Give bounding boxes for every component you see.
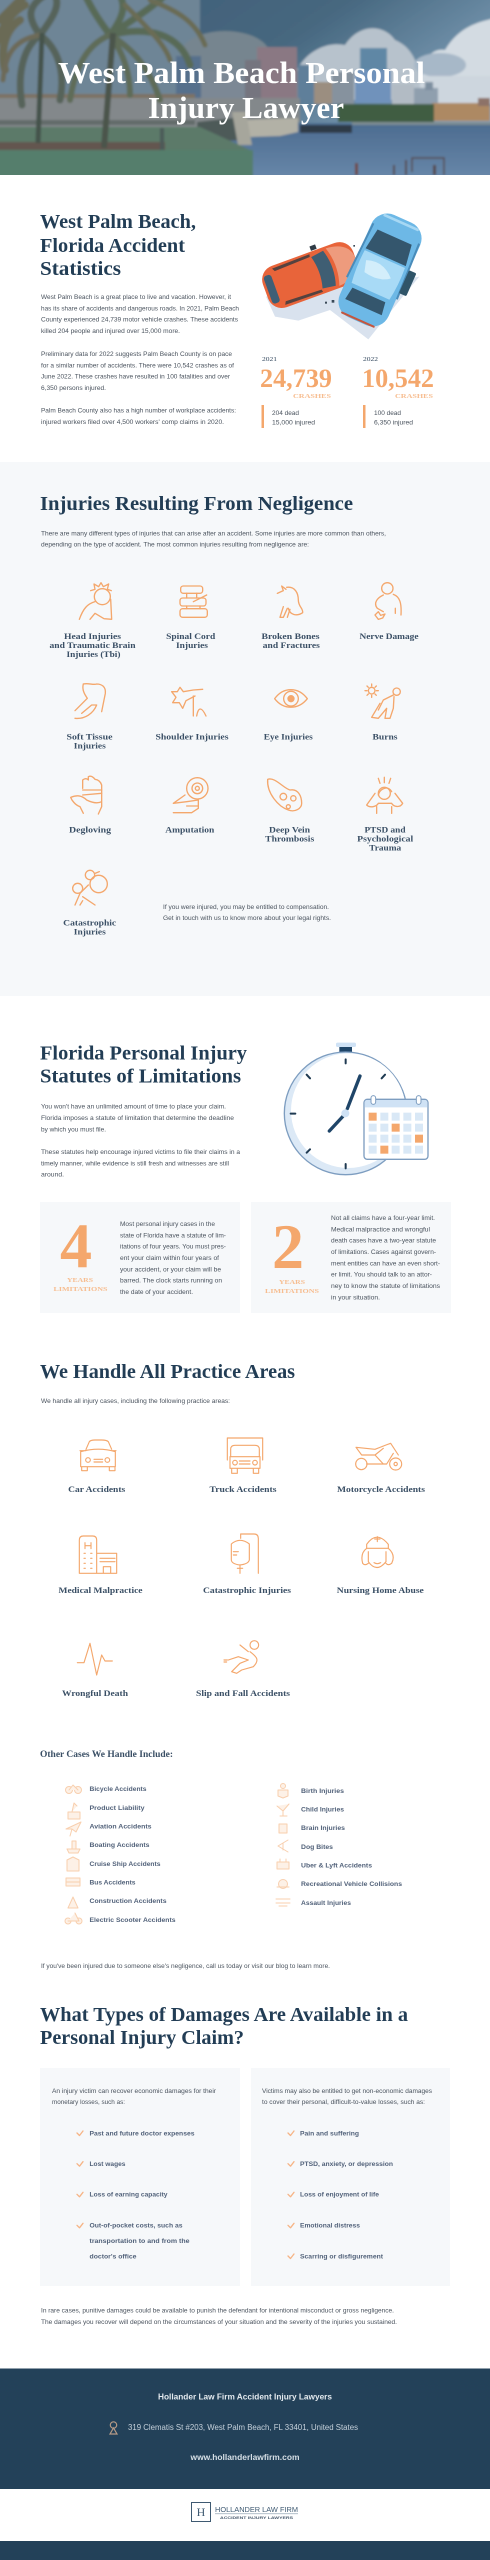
stat: 2022 crashes: 2022 [363, 356, 378, 363]
card: economic damages: An injury victim can recover economic damages for their [52, 2088, 216, 2095]
icon: deep vein [268, 779, 302, 811]
text block: statutes intro: around. [41, 1172, 64, 1179]
text block: statutes intro [41, 1104, 241, 1179]
heading: damages: What Types of Damages Are Available in a [40, 2004, 408, 2026]
injury labels: Injuries [176, 640, 209, 650]
card: economic damages: Past and future doctor expenses [90, 2130, 195, 2137]
list: other cases left column: Boating Accidents [90, 1842, 150, 1849]
injury labels: Injuries (Tbi) [66, 649, 121, 659]
practice area icons [77, 1438, 402, 1675]
injury labels: Psychological [357, 833, 414, 843]
stat: 2022 crashes: 10,542 [362, 364, 434, 393]
card: 2 years limitations [251, 1202, 451, 1313]
hero photo: waterfront skyline [0, 0, 490, 180]
list: other cases right column: Assault Injuries [301, 1900, 351, 1907]
list: other cases left column [65, 1785, 176, 1924]
injury labels: PTSD and [364, 824, 406, 834]
icon: broken bones [277, 586, 303, 617]
practice area labels: Nursing Home Abuse [337, 1585, 424, 1595]
list: other cases left column: Construction Accidents [90, 1898, 167, 1905]
hero title: West Palm Beach Personal [58, 55, 425, 90]
panel: injuries resulting from negligence [0, 462, 490, 996]
text block: injuries intro: There are many different types of injuries that can arise after an accident. Some injuries are more common than others, [41, 530, 386, 538]
injury labels: and Traumatic Brain [50, 640, 136, 650]
stat: 2021 crashes: 15,000 injured [272, 420, 316, 426]
icon: IV drip [231, 1534, 258, 1573]
heading: accident statistics: West Palm Beach, [40, 211, 196, 233]
heading: damages: Personal Injury Claim? [40, 2027, 244, 2049]
injury labels: Thrombosis [265, 833, 315, 843]
hero banner [0, 0, 490, 180]
card: economic damages: doctor's office [90, 2253, 137, 2260]
bridge [0, 98, 300, 128]
icon: shoulder [172, 687, 206, 716]
stat: 2022 crashes [362, 356, 434, 428]
palm fronds [0, 0, 205, 105]
text block: injuries intro [41, 530, 386, 549]
heading: statutes of limitations: Florida Personal Injury [40, 1042, 247, 1064]
card: 4 years limitations: YEARS [67, 1277, 93, 1284]
practice area labels: Medical Malpractice [58, 1585, 143, 1595]
card: 4 years limitations: your accident, or your claim will be [120, 1266, 222, 1273]
icon: motorcycle [356, 1443, 402, 1470]
text block: statistics intro: has its share of accidents and dangerous roads. In 2021, Palm Beach [41, 305, 240, 312]
card: non-economic damages: Emotional distress [300, 2223, 360, 2230]
icon: truck [227, 1438, 263, 1473]
injury labels: Head Injuries [64, 631, 122, 641]
card: economic damages: transportation to and from the [90, 2238, 190, 2245]
list: other cases left column: Aviation Accidents [90, 1824, 152, 1830]
text block: punitive damages: The damages you recover will depend on the circumstances of your situation and the severity of the injuries you sustained. [41, 2319, 397, 2326]
text block: practice areas intro: We handle all injury cases, including the following practice areas: [41, 1398, 230, 1405]
icon: nerve damage [375, 583, 401, 619]
list: other cases right column: Birth Injuries [301, 1788, 344, 1795]
heading: statutes of limitations: Statutes of Limitations [40, 1066, 241, 1088]
text block: compensation note: Get in touch with us to know more about your legal rights. [163, 915, 331, 922]
list icons left [65, 1785, 82, 1924]
icon: slip and fall [224, 1641, 259, 1673]
card: 4 years limitations: the date of your accident. [120, 1289, 193, 1296]
text block: compensation note [163, 904, 331, 922]
text block: statutes intro: You won't have an unlimited amount of time to place your claim. [41, 1104, 226, 1111]
list: other cases left column: Cruise Ship Accidents [90, 1861, 161, 1868]
list: other cases right column: Dog Bites [301, 1844, 333, 1851]
list icons right [276, 1784, 290, 1906]
hero title [58, 55, 425, 125]
card: 2 years limitations: 2 [272, 1211, 304, 1282]
card: 2 years limitations: ment entities can have an even short- [331, 1260, 440, 1267]
stat: 2022 crashes: 6,350 injured [374, 420, 414, 426]
logo: Hollander Law Firm [192, 2502, 298, 2522]
practice area labels: Truck Accidents [210, 1484, 277, 1494]
practice area labels: Car Accidents [68, 1484, 126, 1494]
practice area labels [58, 1484, 426, 1698]
posts [355, 163, 358, 175]
text block: statutes intro: These statutes help encourage injured victims to file their claims in a [41, 1149, 241, 1156]
list: other cases left column: Bicycle Accidents [90, 1786, 147, 1793]
text block: statutes intro: timely manner, while evidence is still fresh and witnesses are still [41, 1160, 229, 1167]
injury labels: Eye Injuries [264, 731, 314, 741]
card: economic damages [40, 2068, 240, 2286]
icon: soft tissue [75, 684, 105, 718]
injury labels: Deep Vein [269, 824, 310, 834]
logo: Hollander Law Firm: ACCIDENT INJURY LAWYERS [220, 2516, 294, 2520]
stat: 2021 crashes: 204 dead [272, 410, 300, 417]
icon: eye [275, 690, 307, 707]
heading: accident statistics [40, 211, 196, 280]
text block: statistics intro: County experienced 24,739 motor vehicle crashes. These accidents [41, 317, 238, 324]
injury labels: Burns [372, 731, 398, 741]
list: other cases right column: Uber & Lyft Accidents [301, 1862, 372, 1870]
list: other cases right column: Brain Injuries [301, 1825, 345, 1832]
card: 2 years limitations: Not all claims have a four-year limit. [331, 1215, 435, 1222]
hero title: Injury Lawyer [148, 90, 344, 125]
stat: 2021 crashes: 24,739 [260, 364, 332, 393]
card: non-economic damages: to cover their personal, difficult-to-value losses, such as: [262, 2099, 425, 2106]
logo: Hollander Law Firm: HOLLANDER LAW FIRM [215, 2505, 298, 2514]
injury labels: Broken Bones [262, 631, 320, 641]
heading: damages [40, 2004, 408, 2049]
text block: statistics intro: West Palm Beach is a great place to live and vacation. However, it [41, 294, 231, 301]
text block: call to action: If you've been injured due to someone else's negligence, call us today or visit our blog to learn more. [41, 1963, 330, 1970]
text block: statutes intro: Florida imposes a statute of limitation that determine the deadline [41, 1115, 235, 1122]
injury labels [50, 631, 419, 937]
text block: statistics intro: Preliminary data for 2022 suggests Palm Beach County is on pace [41, 351, 233, 358]
card: 4 years limitations [40, 1202, 240, 1313]
card: 2 years limitations: LIMITATIONS [265, 1288, 319, 1295]
stat: 2021 crashes: CRASHES [293, 393, 331, 400]
injury labels: Catastrophic [63, 918, 116, 928]
card: 4 years limitations: LIMITATIONS [54, 1286, 108, 1293]
injury labels: Injuries [74, 927, 107, 937]
card: 2 years limitations: in your situation. [331, 1294, 380, 1301]
list: other cases left column: Product Liability [90, 1805, 145, 1812]
card: 4 years limitations: state of Florida have a statute of lim- [120, 1232, 226, 1239]
list: other cases right column: Child Injuries [301, 1806, 344, 1814]
card: 2 years limitations: of limitations. Cases against govern- [331, 1249, 436, 1256]
card: 2 years limitations: er limit. You should talk to an attor- [331, 1272, 432, 1279]
practice area labels: Wrongful Death [62, 1688, 128, 1698]
text block: injuries intro: depending on the type of accident. The most common injuries resulting from negligence are: [41, 542, 309, 549]
illustration: clock and calendar [284, 1043, 428, 1175]
footer: contact band: 319 Clematis St #203, West Palm Beach, FL 33401, United States [128, 2423, 358, 2432]
injury labels: Trauma [369, 842, 402, 852]
practice area labels: Slip and Fall Accidents [196, 1688, 291, 1698]
list: other cases right column: Recreational Vehicle Collisions [301, 1881, 402, 1888]
card: 4 years limitations: 4 [60, 1210, 92, 1281]
text block: statistics intro: killed 204 people and injured over 15,000 more. [41, 328, 180, 335]
illustration: car crash [256, 208, 434, 339]
list: other cases left column: Bus Accidents [90, 1880, 136, 1886]
card: 4 years limitations: ent your claim within four years of [120, 1255, 219, 1262]
shore and hedge [0, 127, 252, 180]
footer: bottom band [0, 2541, 490, 2560]
icon: amputation [173, 778, 208, 813]
footer: contact band: Hollander Law Firm Accident Injury Lawyers [158, 2393, 333, 2402]
heading: statutes of limitations [40, 1042, 247, 1088]
red car [256, 233, 363, 312]
icon: PTSD [367, 777, 403, 813]
card: non-economic damages: PTSD, anxiety, or depression [300, 2161, 393, 2168]
heading: practice areas: We Handle All Practice Areas [40, 1361, 295, 1383]
card: 2 years limitations: ney to know the statute of limitations [331, 1283, 440, 1290]
text block: statistics intro: June 2022. These crashes have resulted in 100 fatalities and over [41, 374, 230, 381]
card: non-economic damages: Pain and suffering [300, 2130, 359, 2137]
practice area labels: Motorcycle Accidents [337, 1484, 426, 1494]
text block: statistics intro: injured workers filed over 4,500 workers' comp claims in 2020. [41, 419, 224, 426]
card: economic damages: Lost wages [90, 2161, 126, 2168]
stat: 2021 crashes [260, 356, 332, 428]
icon: catastrophic injuries [73, 870, 107, 905]
list: other cases right column [276, 1784, 402, 1907]
icon: car [80, 1440, 116, 1471]
card: non-economic damages: Scarring or disfigurement [300, 2253, 384, 2260]
icon: head injury [79, 583, 112, 619]
card: 4 years limitations: itations of four years. You must pres- [120, 1244, 226, 1251]
blue car [332, 208, 434, 335]
footer: contact band: www.hollanderlawfirm.com [189, 2453, 300, 2462]
heading: accident statistics: Florida Accident [40, 235, 185, 257]
card: economic damages: Loss of earning capacity [90, 2192, 168, 2199]
icon: burns [365, 684, 400, 718]
text block: statistics intro: 6,350 persons injured. [41, 385, 106, 392]
text block: punitive damages [41, 2308, 397, 2326]
crash debris [325, 245, 360, 304]
footer: contact band [0, 2368, 490, 2489]
injury labels: Nerve Damage [360, 631, 419, 641]
card: 2 years limitations: YEARS [279, 1279, 305, 1286]
list: other cases left column: Electric Scooter Accidents [90, 1917, 176, 1924]
card: 4 years limitations: barred. The clock starts running on [120, 1278, 223, 1285]
stat: 2022 crashes: 100 dead [374, 410, 402, 417]
card: economic damages: Out-of-pocket costs, such as [90, 2223, 183, 2230]
heading: injuries: Injuries Resulting From Negligence [40, 493, 353, 515]
icon: heartbeat [77, 1643, 112, 1675]
text block: statutes intro: by which you must file. [41, 1126, 106, 1133]
card: 4 years limitations: Most personal injury cases in the [120, 1221, 216, 1228]
check icons [77, 2131, 83, 2228]
text block: compensation note: If you were injured, you may be entitled to compensation. [163, 904, 329, 911]
heading: other cases: Other Cases We Handle Include: [40, 1749, 173, 1760]
stat: 2022 crashes: CRASHES [395, 393, 433, 400]
card: non-economic damages: Victims may also be entitled to get non-economic damages [262, 2088, 432, 2095]
injury labels: Spinal Cord [166, 631, 215, 641]
text block: statistics intro [41, 294, 240, 426]
icon: nurse [362, 1537, 393, 1567]
card: 2 years limitations: death cases have a two-year statute [331, 1238, 437, 1245]
heading: accident statistics: Statistics [40, 258, 121, 280]
card: non-economic damages: Loss of enjoyment of life [300, 2192, 379, 2199]
text block: statistics intro: for a similar number of accidents. There were 10,542 crashes as of [41, 362, 234, 369]
injury labels: and Fractures [263, 640, 321, 650]
icon: degloving [71, 776, 102, 814]
icon: hospital [79, 1536, 117, 1573]
injury labels: Injuries [74, 740, 107, 750]
injury labels: Amputation [165, 824, 215, 834]
injury labels: Shoulder Injuries [156, 731, 229, 741]
card: economic damages: monetary losses, such as: [52, 2099, 125, 2106]
card: 2 years limitations: Medical malpractice and wrongful [331, 1226, 430, 1233]
calendar [364, 1096, 428, 1159]
check icons [288, 2131, 294, 2258]
practice area labels: Catastrophic Injuries [203, 1585, 292, 1595]
stat: 2021 crashes: 2021 [262, 356, 277, 363]
injury labels: Degloving [69, 824, 112, 834]
injury icons [71, 583, 403, 905]
text block: punitive damages: In rare cases, punitive damages could be available to punish the defendant for intentional misconduct or gross negligence. [41, 2308, 394, 2314]
card: non-economic damages [251, 2068, 450, 2286]
text block: statistics intro: Palm Beach County also has a high number of workplace accidents: [41, 408, 236, 415]
icon: location pin [110, 2422, 117, 2434]
injury labels: Soft Tissue [66, 731, 113, 741]
icon: spinal cord [180, 586, 207, 617]
logo: Hollander Law Firm: H [197, 2505, 206, 2519]
